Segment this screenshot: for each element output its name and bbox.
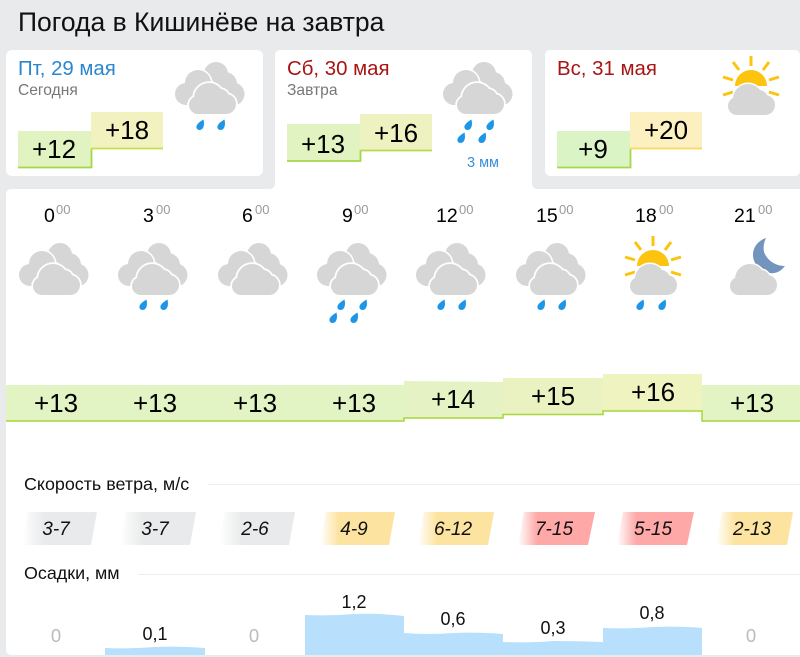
wind speed badges: 2-6 bbox=[240, 519, 269, 540]
hour labels: 9 bbox=[342, 205, 353, 227]
hour labels: 12 bbox=[436, 205, 458, 227]
temperature values: +13 bbox=[34, 388, 78, 418]
hour labels: 3 bbox=[143, 205, 154, 227]
icon: clouds with rain bbox=[175, 62, 244, 130]
wind speed badges: 3-7 bbox=[42, 519, 71, 540]
minimum temperature bbox=[287, 124, 360, 161]
precipitation values: 1,2 bbox=[341, 592, 367, 612]
maximum temperature bbox=[360, 114, 432, 150]
panel: Saturday card bbox=[287, 58, 512, 171]
temperature values: +13 bbox=[233, 388, 277, 418]
precipitation values: 0,3 bbox=[540, 618, 566, 638]
date: Sunday: Вс, 31 мая bbox=[557, 58, 657, 80]
hour labels bbox=[44, 202, 772, 227]
temperature values: +13 bbox=[133, 388, 177, 418]
temperature values: +13 bbox=[332, 388, 376, 418]
hour labels: 00 bbox=[255, 202, 269, 217]
hour labels: 21 bbox=[734, 205, 756, 227]
precipitation values: 0 bbox=[746, 625, 756, 646]
hour labels: 00 bbox=[559, 202, 573, 217]
precipitation values: 0,8 bbox=[639, 603, 665, 623]
hour labels: 00 bbox=[459, 202, 473, 217]
wind speed badges bbox=[22, 512, 793, 545]
panel: Friday card bbox=[6, 50, 263, 176]
precipitation values bbox=[51, 592, 756, 646]
wind speed badges: 3-7 bbox=[141, 519, 170, 540]
date: Saturday: Сб, 30 мая bbox=[287, 58, 389, 80]
icon: 9:00 clouds with heavy rain bbox=[317, 243, 386, 323]
temperature values: +13 bbox=[730, 388, 774, 418]
temperature band chart bbox=[6, 374, 800, 421]
maximum temperature: +18 bbox=[105, 115, 149, 145]
temperature values: +14 bbox=[431, 384, 475, 414]
temperature values: +15 bbox=[531, 381, 575, 411]
title: Погода в Кишинёве на завтра bbox=[18, 7, 385, 37]
icon: 21:00 moon and cloud bbox=[730, 238, 785, 295]
label: today: Сегодня bbox=[18, 82, 78, 99]
precipitation area chart bbox=[51, 592, 756, 655]
hour labels: 00 bbox=[156, 202, 170, 217]
hour labels: 18 bbox=[635, 205, 657, 227]
minimum temperature bbox=[557, 131, 630, 168]
icon: 12:00 clouds with rain bbox=[416, 243, 486, 310]
panel: Sunday card bbox=[545, 50, 800, 176]
hour labels: 00 bbox=[758, 202, 772, 217]
hour labels: 6 bbox=[242, 205, 253, 227]
maximum temperature: +16 bbox=[374, 118, 418, 148]
hour labels: 00 bbox=[659, 202, 673, 217]
wind speed badges: 5-15 bbox=[634, 519, 672, 540]
wind speed badges: 6-12 bbox=[434, 519, 472, 540]
wind speed badges: 4-9 bbox=[340, 519, 368, 540]
minimum temperature: +13 bbox=[301, 129, 345, 159]
rainfall amount: 3 мм bbox=[467, 155, 499, 171]
precipitation values: 0,6 bbox=[440, 609, 466, 629]
date: Friday: Пт, 29 мая bbox=[18, 58, 116, 80]
hour labels: 00 bbox=[56, 202, 70, 217]
wind speed badges: 2-13 bbox=[732, 519, 771, 540]
wind speed badges: 7-15 bbox=[535, 519, 573, 540]
icon: 6:00 clouds bbox=[218, 243, 288, 295]
label: tomorrow: Завтра bbox=[287, 82, 338, 99]
hour labels: 00 bbox=[354, 202, 368, 217]
temperature values bbox=[34, 377, 774, 418]
icon: 15:00 clouds with rain bbox=[516, 243, 586, 310]
precipitation values: 0 bbox=[249, 625, 259, 646]
icon: clouds with heavy rain bbox=[443, 62, 512, 143]
precipitation values: 0,1 bbox=[142, 624, 168, 644]
icon: 3:00 clouds with rain bbox=[118, 243, 188, 310]
hour labels: 15 bbox=[536, 205, 558, 227]
precipitation values: 0 bbox=[51, 625, 61, 646]
icon: sun behind cloud bbox=[723, 56, 779, 115]
temperature values: +16 bbox=[631, 377, 675, 407]
minimum temperature: +12 bbox=[32, 134, 76, 164]
maximum temperature bbox=[630, 112, 702, 148]
icon: 18:00 sun, cloud and rain bbox=[625, 236, 681, 310]
maximum temperature bbox=[91, 112, 163, 148]
heading: precipitation: Осадки, мм bbox=[24, 563, 120, 583]
minimum temperature: +9 bbox=[578, 134, 608, 164]
icon: 0:00 clouds bbox=[19, 243, 88, 295]
maximum temperature: +20 bbox=[644, 115, 688, 145]
minimum temperature bbox=[18, 131, 92, 168]
heading: wind speed: Скорость ветра, м/с bbox=[24, 474, 189, 494]
hour labels: 0 bbox=[44, 205, 55, 227]
